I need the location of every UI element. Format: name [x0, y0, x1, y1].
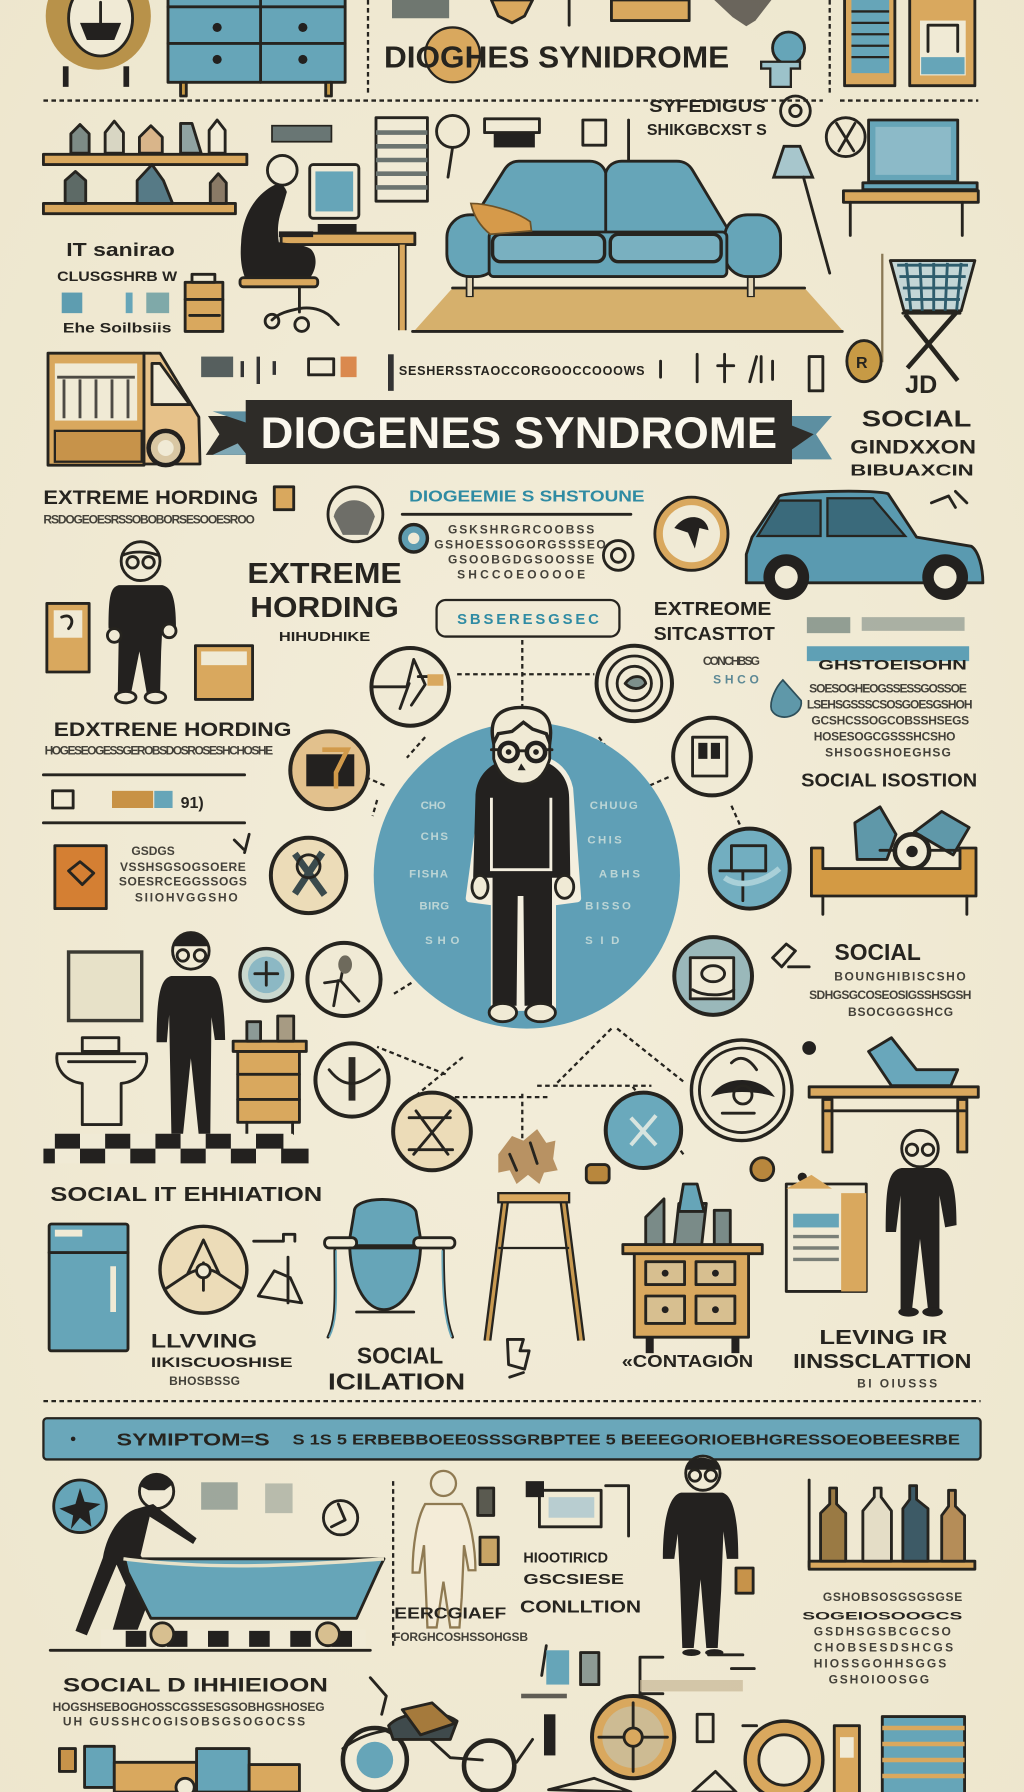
text: living in: LEVING IR: [819, 1326, 948, 1349]
text block: left garbled: CLUSGSHRB W: [57, 269, 177, 284]
sofa on rug: [413, 161, 842, 331]
text: generic: FORGHCOSHSSOHGSB: [393, 1630, 528, 1644]
text: social inhibition: SOCIAL IT EHHIATION: [50, 1183, 322, 1206]
central person: [470, 707, 577, 1022]
banner: symptoms: S 1S 5 ERBEBBOEE0SSSGRBPTEE 5 BEEEGORIOEBHGRESSOEOBEESRBE: [293, 1433, 960, 1449]
side cabinet: [786, 1175, 866, 1291]
text: extreme hording lower: HOGESEOGESSGEROBSDOSROSESHCHOSHE: [45, 743, 273, 757]
shelf with bottles: [809, 1480, 975, 1569]
icon cluster: monitor: [526, 1481, 629, 1536]
small tool icons: [272, 115, 629, 201]
text block: bottom right: [802, 1590, 963, 1686]
text: contagion: «CONTAGION: [622, 1351, 753, 1371]
text block: extreme right: SITCASTTOT: [654, 623, 775, 644]
cabinet with items: [623, 1184, 762, 1353]
text block: social: GINDXXON: [850, 437, 976, 459]
text connection box: SBSERESGSEC: [457, 612, 599, 628]
central circle faint text: CHUUG: [590, 800, 638, 812]
dividers: [43, 100, 978, 102]
box left: [47, 603, 89, 672]
top small icons: [392, 0, 771, 26]
text block: bottom right: GSHOIOOSGG: [829, 1672, 929, 1686]
side table: [233, 1016, 306, 1134]
text block: social: SOCIAL: [862, 405, 971, 431]
banner: main title: DIOGENES SYNDROME: [261, 409, 777, 458]
text: extreme hording large: [247, 558, 402, 644]
teal heading with text: [402, 489, 645, 581]
person at computer desk: [240, 155, 415, 331]
text block: social: [850, 405, 976, 479]
icon: bookcases: [845, 0, 975, 86]
orbit icon 3: [290, 731, 368, 809]
icon: bowl circle: [328, 487, 383, 542]
chart strip: [43, 775, 245, 823]
text: generic: [393, 1605, 528, 1644]
orange box and text: SIIOHVGGSHO: [135, 891, 238, 905]
text block: bottom right: CHOBSESDSHCGS: [814, 1640, 953, 1654]
text: social isolation: SOCIAL: [357, 1342, 443, 1368]
small box stack: [478, 1488, 498, 1565]
small bullets: [586, 1041, 816, 1183]
teal heading with text: SHCCOEOOOOE: [457, 567, 585, 581]
text block: extreme right: CONCHBSG: [703, 654, 760, 668]
icon: monitor with tick circle: [826, 118, 978, 235]
text: living in: [793, 1326, 971, 1390]
text block: bottom right: GSDHSGSBCGCSO: [814, 1624, 951, 1638]
icon: gold coin: [847, 341, 881, 382]
text: social isolation: ICILATION: [328, 1369, 465, 1395]
heading: extreme hording top: [43, 487, 294, 526]
text: living: IIKISCUOSHISE: [151, 1355, 293, 1370]
orbit icon 11: [393, 1093, 471, 1170]
text block: extreme right: EXTREOME: [654, 598, 771, 619]
central circle faint text: CHO: [421, 800, 446, 812]
text block: garbled subtitle: [647, 96, 767, 139]
mirror: [69, 952, 142, 1021]
orbit icon 12: [606, 1093, 681, 1168]
text: social inhibition bottom: SOCIAL D IHHIEIOON: [63, 1674, 328, 1696]
icon: blue drawer dresser: [168, 0, 345, 96]
orange box and text: VSSHSGSOGSOERE: [120, 860, 246, 874]
small bird icon: [773, 944, 809, 967]
text: social isolation: [328, 1342, 465, 1395]
person bathroom: [157, 933, 225, 1145]
connector lines: [366, 640, 743, 1154]
fridge: [49, 1224, 128, 1351]
text block: extreme right: SHCO: [713, 672, 759, 686]
heading: top title: [384, 27, 729, 82]
heading: extreme hording top: RSDOGEOESRSSOBOBORSESOOESROO: [43, 512, 255, 526]
central circle faint text: BIRG: [419, 901, 449, 913]
text: conditions: CONLLTION: [520, 1597, 641, 1617]
central circle faint text: CHIS: [587, 834, 622, 846]
icons mid bottom: [370, 1646, 754, 1714]
orbit icon 8: [674, 937, 752, 1015]
icon: box: [185, 274, 223, 331]
orange box and text: GSDGS: [131, 844, 175, 858]
icons: round ones bottom: [693, 1714, 859, 1792]
central circle faint text: FISHA: [409, 869, 448, 881]
icon: gold circle: [655, 497, 728, 570]
text: social right: BOUNGHIBISCSHO: [834, 970, 966, 984]
orbit icon 1: [371, 648, 449, 726]
text: extreme hording lower: [45, 719, 291, 757]
text block: extreme right: [654, 598, 775, 686]
crate: [195, 646, 253, 699]
icon: gold coin: R: [856, 355, 868, 372]
text block: garbled subtitle: SYFEDIGUS: [649, 96, 766, 116]
icon: ring with star: [54, 1480, 106, 1533]
icon: round mirror on stand: [46, 0, 151, 87]
orbit icon 4: [673, 718, 751, 795]
teal heading with text: GSKSHRGRCOOBSS: [448, 523, 594, 537]
text: conditions: GSCSIESE: [523, 1572, 624, 1588]
central circle faint text: ABHS: [599, 869, 640, 881]
text: social inhibition bottom: HOGSHSEBOGHOSSCGSSESGSOBHGSHOSEG: [53, 1700, 325, 1714]
text: living: LLVVING: [151, 1330, 257, 1352]
central circle faint text: CHS: [421, 831, 448, 843]
orbit icon 5: [271, 838, 346, 913]
text: living: BHOSBSSG: [169, 1374, 240, 1388]
chart strip: 91): [181, 795, 204, 812]
person pushing tub: [50, 1474, 384, 1650]
icon: gold wheel: [592, 1696, 674, 1778]
text: conditions: HIOOTIRICD: [523, 1550, 608, 1566]
banner: symptoms: SYMIPTOM=S: [117, 1430, 270, 1450]
text: social right: BSOCGGGSHCG: [848, 1005, 953, 1019]
text strip: SESHERSSTAOCCORGOOCCOOOWS: [399, 364, 645, 378]
bird nest shape: [498, 1129, 558, 1184]
car: [746, 491, 983, 600]
text block: bottom right: GSHOBSOSGSGSGSE: [823, 1590, 962, 1604]
orbit icon 7: [307, 943, 381, 1016]
right text block: SOESOGHEOGSSESSGOSSOE: [809, 682, 967, 696]
icon: target circle: [781, 96, 810, 126]
small tools: [254, 1234, 302, 1303]
text: living in: IINSSCLATTION: [793, 1350, 971, 1373]
teal drop icon: [771, 680, 801, 717]
text: social inhibition bottom: UH GUSSHCOGISOBSGSOGOCSS: [63, 1715, 305, 1729]
text: social right: [809, 939, 971, 1019]
blue chair: [325, 1199, 455, 1337]
divider: [43, 1400, 981, 1402]
orange box and text: [55, 834, 249, 909]
text: generic: EERCGIAEF: [394, 1605, 507, 1622]
text block: bottom right: HIOSSGOHHSGGS: [814, 1656, 946, 1670]
text: extreme hording lower: EDXTRENE HORDING: [54, 719, 291, 741]
truck: [48, 353, 200, 467]
right text block: [801, 617, 977, 790]
text: social inhibition bottom: [53, 1674, 328, 1729]
central circle faint text: SHO: [425, 935, 460, 947]
banner: symptoms: [43, 1418, 981, 1459]
banner: main title: [206, 400, 832, 464]
right text block: SOCIAL ISOSTION: [801, 769, 977, 790]
heading: top title: DIOGHES SYNIDROME: [384, 39, 729, 74]
text block: social: BIBUAXCIN: [850, 462, 974, 479]
checker floor: [43, 1134, 311, 1163]
blue shelf bottom right: [882, 1717, 965, 1792]
truck bottom left: [59, 1746, 299, 1792]
icon: shopping cart: [882, 254, 975, 381]
central teal circle: [374, 722, 680, 1029]
motorbike: [343, 1703, 514, 1792]
right text block: GCSHCSSOGCOBSSHSEGS: [811, 714, 969, 728]
teal heading with text: GSOOBGDGSOOSSE: [448, 552, 594, 566]
text: conditions: [520, 1550, 641, 1617]
bench with basin: [809, 1038, 978, 1152]
orbit icon 9: [315, 1043, 389, 1117]
small figure: [507, 1339, 529, 1377]
text block: left garbled: Ehe Soilbsiis: [63, 321, 172, 336]
icon: globe on stand: [761, 32, 805, 87]
person right: [886, 1130, 957, 1317]
biohazard: [160, 1226, 247, 1313]
sink: [57, 1038, 147, 1125]
text connection box: [437, 600, 619, 637]
orange box and text: SOESRCEGGSSOGS: [119, 875, 247, 889]
sofa with items right: [811, 807, 976, 914]
right text block: HOSESOGCGSSSHCSHO: [814, 730, 955, 744]
shelves with bottles: [43, 120, 247, 214]
central circle faint text: SID: [585, 935, 619, 947]
bottom clutter: [517, 1714, 631, 1792]
right text block: SHSOGSHOEGHSG: [825, 746, 951, 760]
text: living in: BI OIUSSS: [857, 1376, 937, 1390]
icon: floor lamp: [774, 146, 830, 273]
text block: left garbled: [57, 239, 177, 336]
text: extreme hording large: HORDING: [250, 592, 399, 624]
text block: bottom right: SOGEIOSOOGCS: [802, 1610, 963, 1622]
text block: left garbled: IT sanirao: [66, 239, 175, 260]
heading: extreme hording top: EXTREME HORDING: [43, 487, 258, 509]
text: living: [151, 1330, 293, 1388]
text: extreme hording large: EXTREME: [247, 558, 402, 590]
label: small letters: JD: [905, 371, 937, 399]
text strip: [201, 354, 823, 391]
icon: teal ring: [240, 949, 293, 1001]
small text icons: [201, 1482, 358, 1535]
person right bottom: [663, 1456, 753, 1656]
orbit icon 10: [691, 1040, 792, 1141]
orbit icon 2: [597, 646, 672, 721]
teal heading with text: GSHOESSOGORGSSSEO: [434, 538, 606, 552]
text block: garbled subtitle: SHIKGBCXST S: [647, 122, 767, 139]
central circle faint text: BISSO: [585, 901, 631, 913]
text: extreme hording large: HIHUDHIKE: [279, 630, 370, 644]
stool: [485, 1193, 584, 1341]
teal heading with text: DIOGEEMIE S SHSTOUNE: [409, 489, 645, 506]
right text block: GHSTOEISOHN: [818, 658, 967, 673]
orbit icon 6: [710, 829, 790, 909]
small round icons: [400, 525, 633, 570]
text: social right: SDHGSGCOSEOSIGSSHSGSH: [809, 988, 971, 1002]
central circle faint text: [409, 800, 640, 947]
text: social right: SOCIAL: [835, 939, 921, 965]
person: standing left: [107, 542, 176, 703]
figure outline: [413, 1471, 475, 1627]
right text block: LSEHSGSSSCSOSGOESGSHOH: [807, 698, 973, 712]
